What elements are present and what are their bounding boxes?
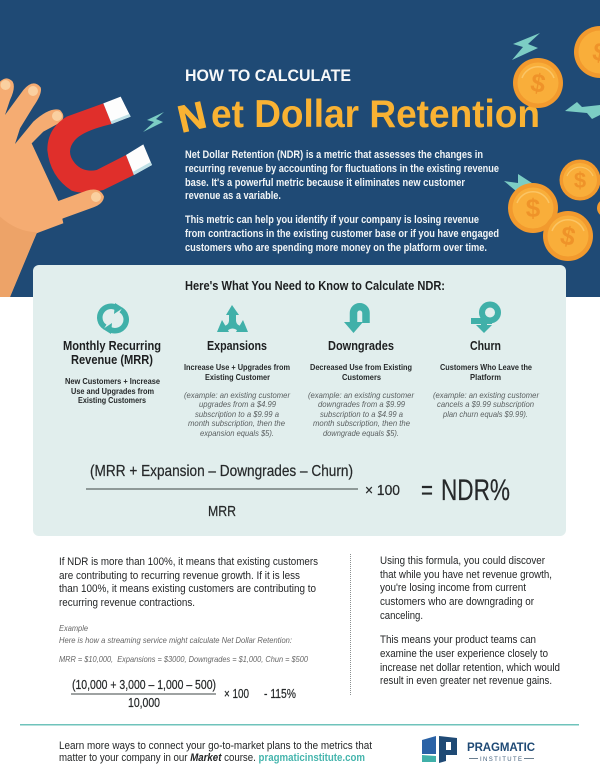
column: expansions: Existing Customer — [205, 372, 271, 382]
icon: coin small: $ — [574, 168, 586, 193]
text: NDR explanation: recurring revenue contractions. — [59, 597, 195, 609]
column: expansions: Expansions — [207, 339, 267, 353]
text: formula discovery: you're losing income from current — [380, 582, 527, 594]
column: expansions: subscription to a $9.99 a — [195, 409, 279, 419]
icon: downgrades arrow — [344, 307, 366, 333]
column: expansions: expansion equals $5). — [200, 428, 274, 438]
column: downgrades: downgrades from a $9.99 — [318, 399, 405, 409]
text: NDR explanation: are contributing to recurring revenue growth. If it is less — [59, 570, 300, 582]
column: monthly recurring revenue: Existing Customers — [78, 395, 146, 405]
column: churn: plan churn equals $9.99). — [442, 409, 528, 419]
footer call to action: Learn more ways to connect your go-to-market plans to the metrics that — [59, 740, 373, 752]
formula: worked example: × 100 — [224, 686, 249, 701]
icon: coin lower right: $ — [558, 220, 579, 252]
column: downgrades: subscription to a $4.99 a — [320, 409, 403, 419]
text: formula discovery: canceling. — [380, 610, 423, 622]
logo: Pragmatic Institute: INSTITUTE — [480, 757, 522, 763]
intro paragraph 2: customers who are spending more money on the platform over time. — [185, 242, 487, 254]
intro paragraph 1: Net Dollar Retention (NDR) is a metric that assesses the changes in — [185, 149, 483, 161]
intro paragraph 2 — [185, 214, 499, 254]
title: net dollar retention: N — [174, 94, 210, 142]
icon: coin small — [560, 160, 600, 200]
text: formula discovery: that while you have net revenue growth, — [380, 569, 552, 581]
column: churn: Customers Who Leave the — [440, 362, 532, 372]
text: streaming example — [59, 623, 308, 664]
icon: middle lightning bolt — [565, 102, 600, 119]
column: expansions: Increase Use + Upgrades from — [184, 362, 290, 372]
column: churn: (example: an existing customer — [433, 390, 540, 400]
icon: top lightning bolt — [512, 33, 540, 60]
text: formula discovery: Using this formula, you could discover — [380, 555, 545, 567]
text: streaming example: Example — [59, 623, 88, 633]
footer call to action — [59, 740, 373, 764]
formula: NDR: × 100 — [365, 483, 400, 499]
text: formula discovery — [380, 555, 552, 622]
text: streaming example: Here is how a streaming service might calculate Net Dollar Retention: — [59, 635, 292, 645]
formula: NDR: NDR% — [441, 474, 510, 507]
text: product teams: increase net dollar retention, which would — [380, 662, 560, 674]
column: expansions — [184, 339, 291, 438]
intro paragraph 1 — [185, 149, 499, 202]
column: monthly recurring revenue: Revenue (MRR) — [71, 353, 153, 367]
column: downgrades: downgrade equals $5). — [323, 428, 399, 438]
title: how to calculate: HOW TO CALCULATE — [185, 67, 351, 85]
icon: expansions arrows — [217, 305, 248, 332]
text: NDR explanation: than 100%, it means existing customers are contributing to — [59, 583, 316, 595]
column: downgrades: Downgrades — [328, 339, 394, 353]
intro paragraph 1: recurring revenue by accounting for fluctuations in the existing revenue — [185, 163, 499, 175]
column: churn: Churn — [470, 339, 501, 353]
intro paragraph 2: This metric can help you identify if your company is losing revenue — [185, 214, 479, 226]
text: product teams: result in even greater net revenue gains. — [380, 675, 552, 687]
header background — [0, 0, 600, 297]
column: monthly recurring revenue: Monthly Recurring — [63, 339, 161, 353]
formula: worked example: - 115% — [264, 686, 296, 701]
icon: recurring arrows — [100, 303, 126, 334]
icon: coin lower left — [508, 183, 558, 233]
panel heading: Here's What You Need to Know to Calculate NDR: — [185, 279, 445, 293]
text: NDR explanation: If NDR is more than 100%, it means that existing customers — [59, 556, 318, 568]
column: downgrades: (example: an existing customer — [308, 390, 415, 400]
column: churn — [433, 339, 540, 419]
column: downgrades: Customers — [342, 372, 381, 382]
text: streaming example: MRR = $10,000, Expansions = $3000, Downgrades = $1,000, Chun = $500 — [59, 654, 308, 664]
formula: worked example: (10,000 + 3,000 – 1,000 – 500) — [72, 677, 216, 692]
title: net dollar retention: et Dollar Retention — [211, 93, 540, 136]
icon: lower lightning bolt — [504, 174, 535, 196]
text: product teams: This means your product teams can — [380, 634, 536, 646]
icon: right edge coin — [597, 199, 600, 217]
text: formula discovery: customers who are downgrading or — [380, 596, 534, 608]
icon: coin top right — [574, 26, 600, 78]
column: expansions: month subscription, then the — [188, 418, 285, 428]
formula: NDR: MRR — [208, 503, 236, 520]
formula: worked example: 10,000 — [128, 695, 160, 710]
icon: hand holding magnet — [0, 78, 152, 297]
column: monthly recurring revenue — [63, 339, 161, 405]
formula: NDR: = — [421, 475, 433, 505]
column: churn: Platform — [470, 372, 501, 382]
column: downgrades: month subscription, then the — [313, 418, 410, 428]
column: monthly recurring revenue: New Customers + Increase — [65, 376, 160, 386]
column: expansions: (example: an existing customer — [184, 390, 291, 400]
column: churn: cancels a $9.99 subscription — [437, 399, 534, 409]
icon: coin top — [513, 58, 563, 108]
intro paragraph 1: base. It's a powerful metric because it eliminates new customer — [185, 177, 466, 189]
icon: churn loop — [471, 304, 498, 333]
formula: worked example — [71, 677, 296, 710]
icon: coin lower right — [543, 211, 593, 261]
teal footer rule — [20, 724, 579, 726]
intro paragraph 2: from contractions in the existing customer base or if you have engaged — [185, 228, 499, 240]
intro paragraph 1: revenue as a variable. — [185, 190, 281, 202]
column: monthly recurring revenue: Use and Upgrades from — [71, 386, 154, 396]
icon: left lightning bolt — [143, 112, 164, 132]
text: product teams — [380, 634, 560, 687]
logo: Pragmatic Institute — [422, 736, 535, 763]
logo: Pragmatic Institute: PRAGMATIC — [467, 742, 535, 754]
text: product teams: examine the user experience closely to — [380, 648, 548, 660]
column: downgrades — [308, 339, 415, 438]
formula: NDR — [86, 463, 510, 520]
text: NDR explanation — [59, 556, 318, 609]
icon: coin lower left: $ — [526, 193, 541, 223]
formula: NDR: (MRR + Expansion – Downgrades – Churn) — [90, 463, 353, 480]
column: downgrades: Decreased Use from Existing — [310, 362, 412, 372]
icon: coin top: $ — [528, 67, 548, 99]
column: expansions: upgrades from a $4.99 — [199, 399, 276, 409]
dotted column divider — [350, 554, 352, 695]
panel: what you need to know — [33, 265, 566, 536]
footer call to action: matter to your company in our Market course. pragmaticinstitute.com — [59, 752, 365, 764]
